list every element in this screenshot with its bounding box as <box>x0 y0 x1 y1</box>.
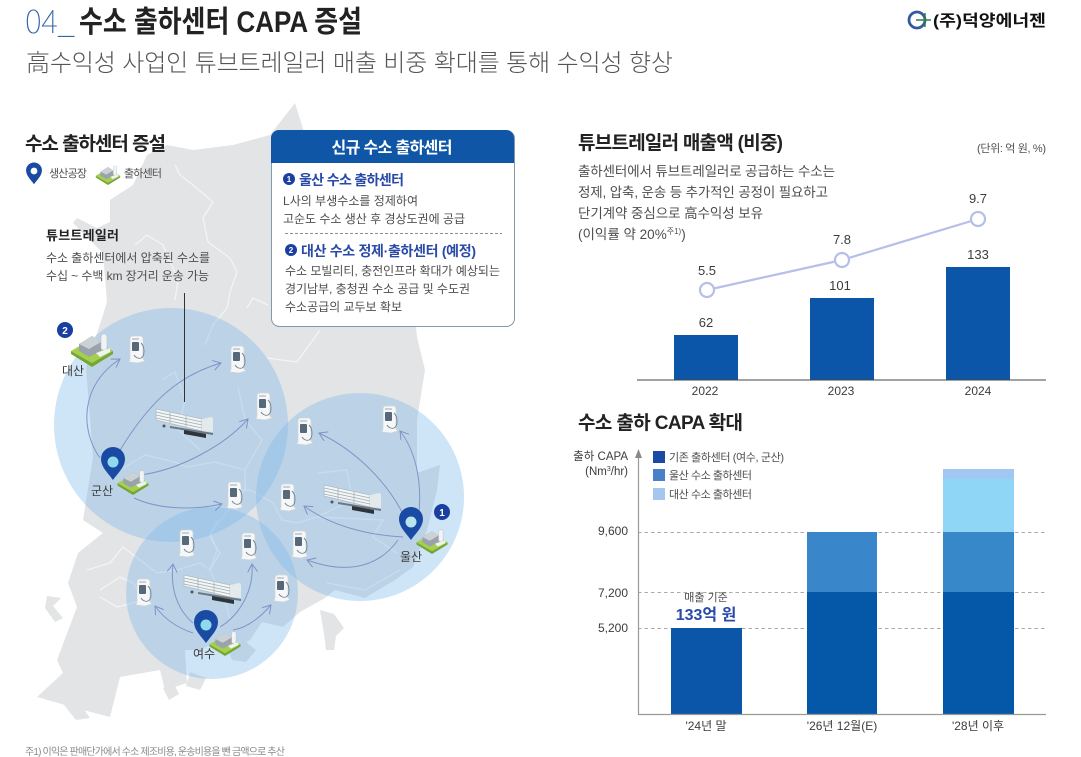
axis title: (Nm <box>585 466 607 478</box>
axis ticks: 9,600 <box>598 524 628 538</box>
capacity legend: 울산 수소 출하센터 <box>669 468 752 482</box>
revenue description: 단기계약 중심으로 高수익성 보유 <box>578 205 763 221</box>
period labels <box>685 719 1004 733</box>
Daesan center item <box>285 243 500 314</box>
site: Daesan: 대산 <box>62 364 84 378</box>
site: Gunsan: 군산 <box>91 484 113 498</box>
Daesan center item: 2 <box>289 246 294 255</box>
revenue callout: 133억 원 <box>676 606 736 624</box>
heading: tube trailer revenue: 튜브트레일러 매출액 (비중) <box>578 132 783 154</box>
axis ticks <box>598 524 628 635</box>
revenue description: 정제, 압축, 운송 등 추가적인 공정이 필요하고 <box>578 185 828 200</box>
Daesan center item: 대산 수소 정제·출하센터 (예정) <box>301 243 476 259</box>
tube trailers <box>156 409 381 604</box>
period labels: '24년 말 <box>685 719 727 733</box>
capacity stacked bars <box>671 469 1014 714</box>
site: Ulsan: 1 <box>439 508 445 519</box>
map legend <box>26 162 162 185</box>
axis ticks: 7,200 <box>598 586 628 600</box>
heading: hydrogen center expansion: 수소 출하센터 증설 <box>25 133 166 155</box>
chart values: 7.8 <box>833 232 851 247</box>
site: Ulsan <box>399 504 450 564</box>
axis ticks: 5,200 <box>598 621 628 635</box>
chart values: 9.7 <box>969 191 987 206</box>
capacity legend: 기존 출하센터 (여수, 군산) <box>669 450 784 464</box>
Ulsan center item: 울산 수소 출하센터 <box>299 172 404 188</box>
coverage circles <box>54 308 464 679</box>
subtitle: 高수익성 사업인 튜브트레일러 매출 비중 확대를 통해 수익성 향상 <box>26 50 673 77</box>
site: Ulsan: 울산 <box>400 550 422 564</box>
site: Yeosu: 여수 <box>193 647 215 661</box>
chart values: 133 <box>967 247 989 262</box>
map legend: 생산공장 <box>49 167 87 180</box>
Daesan center item: 수소 모빌리티, 충전인프라 확대가 예상되는 <box>285 264 500 278</box>
Ulsan center item: 고순도 수소 생산 후 경상도권에 공급 <box>283 212 465 226</box>
year labels: 2023 <box>828 384 855 398</box>
period labels: '28년 이후 <box>952 719 1004 733</box>
title <box>25 0 362 43</box>
company logo: (주)덕양에너젠 <box>933 12 1046 30</box>
map islands <box>45 596 344 720</box>
site: Daesan <box>57 322 84 378</box>
company logo <box>909 12 1046 30</box>
share line <box>700 212 985 297</box>
heading: capacity expansion: 수소 출하 CAPA 확대 <box>578 412 743 434</box>
panel: new hydrogen centers <box>271 130 514 326</box>
Ulsan center item <box>283 172 465 226</box>
revenue description: ) <box>681 227 686 242</box>
panel: new hydrogen centers: 신규 수소 출하센터 <box>332 139 452 157</box>
year labels: 2024 <box>965 384 992 398</box>
revenue description: 주1) <box>667 227 682 236</box>
leader line to tube trailer <box>184 293 186 402</box>
hydrogen stations <box>129 336 398 606</box>
axis title: 출하 CAPA <box>573 449 628 463</box>
tube trailer note: 수십 ~ 수백 km 장거리 운송 가능 <box>46 269 209 283</box>
revenue bars <box>674 267 1010 380</box>
chart values <box>698 191 989 330</box>
map silhouette <box>37 103 440 717</box>
Ulsan center item: 1 <box>287 175 292 184</box>
map legend: 출하센터 <box>124 166 162 180</box>
Ulsan center item: L사의 부생수소를 정제하여 <box>283 194 418 208</box>
revenue description: (이익률 약 20% <box>578 227 667 242</box>
chart values: 62 <box>699 315 713 330</box>
supply arrows <box>87 359 420 633</box>
revenue callout: 매출 기준 <box>684 591 728 604</box>
chart values: 5.5 <box>698 263 716 278</box>
year labels: 2022 <box>692 384 719 398</box>
tube trailer note: 튜브트레일러 <box>46 228 119 243</box>
capacity chart <box>573 449 1046 733</box>
axes <box>638 454 1046 714</box>
capacity legend <box>653 450 784 501</box>
region boundaries <box>87 165 400 620</box>
site: Daesan: 2 <box>62 326 68 337</box>
period labels: '26년 12월(E) <box>807 719 877 733</box>
tube trailer note: 수소 출하센터에서 압축된 수소를 <box>46 251 210 265</box>
year labels <box>692 384 992 398</box>
Daesan center item: 수소공급의 교두보 확보 <box>285 300 402 314</box>
revenue description <box>578 164 835 242</box>
shipping centers <box>71 334 448 656</box>
unit note: (단위: 억 원, %) <box>977 142 1046 155</box>
revenue chart <box>637 191 1046 398</box>
capacity legend: 대산 수소 출하센터 <box>669 487 752 501</box>
revenue callout <box>676 591 736 624</box>
site: Gunsan <box>91 447 125 498</box>
Daesan center item: 경기남부, 충청권 수소 공급 및 수도권 <box>285 282 470 296</box>
title: 수소 출하센터 CAPA 증설 <box>79 6 362 39</box>
axis title: /hr) <box>611 466 628 478</box>
map of South Korea <box>37 103 464 720</box>
axis title: 3 <box>607 466 611 473</box>
gridlines <box>638 532 1046 628</box>
axis title <box>573 449 628 478</box>
tube trailer note <box>46 228 210 283</box>
revenue description: 출하센터에서 튜브트레일러로 공급하는 수소는 <box>578 164 835 179</box>
chart values: 101 <box>829 278 851 293</box>
site: Yeosu <box>193 610 218 661</box>
